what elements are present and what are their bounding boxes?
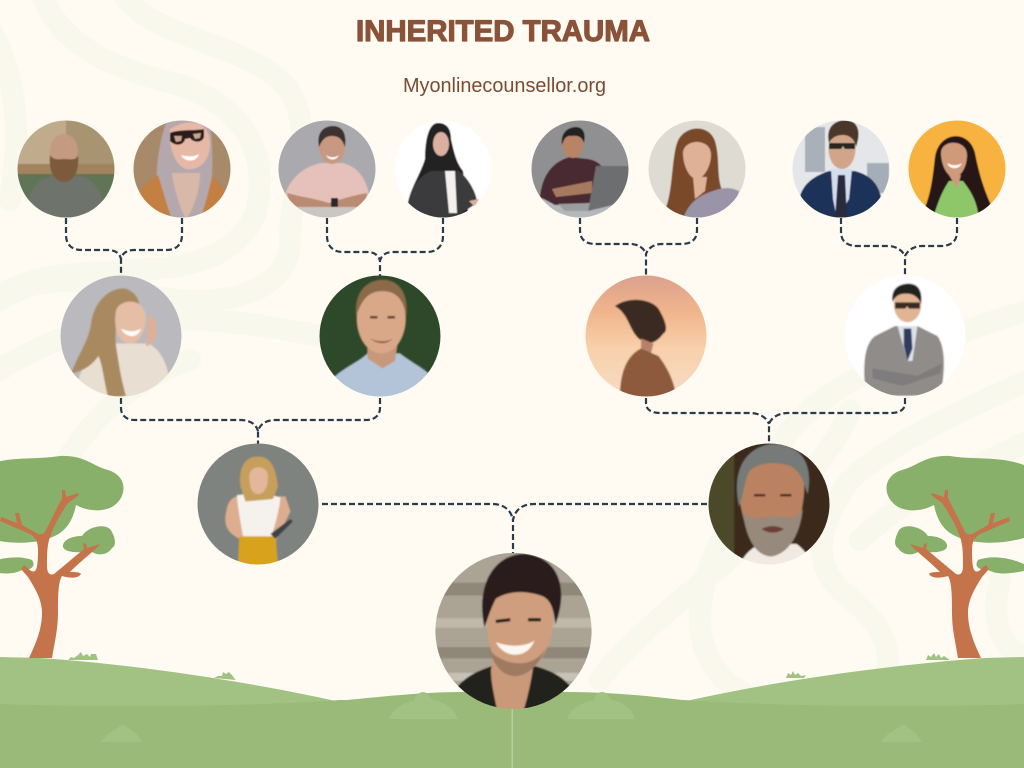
portrait: smiling young man — [433, 550, 594, 712]
left hill — [0, 657, 336, 707]
portrait: woman with long brown hair — [647, 119, 747, 219]
portrait: woman with glasses — [132, 119, 232, 219]
connector: pair 3 — [580, 218, 697, 276]
ground hills — [0, 652, 1024, 768]
connector: right parents — [646, 398, 905, 444]
mounds — [389, 692, 458, 719]
connector: main parents — [322, 504, 707, 553]
right hill — [686, 657, 1024, 707]
connector: pair 4 — [841, 218, 957, 276]
portrait: bearded man — [16, 119, 116, 219]
middle hill — [300, 692, 720, 768]
portrait: woman in white top with tablet — [196, 442, 320, 566]
tree: left — [0, 456, 124, 658]
connector: left parents — [121, 398, 380, 444]
portrait: man in pink shirt — [277, 119, 377, 219]
title: INHERITED TRAUMA — [356, 15, 650, 48]
subtitle: Myonlinecounsellor.org — [403, 75, 606, 97]
canopy main — [0, 456, 124, 543]
portrait: grey-haired man — [707, 442, 831, 566]
small canopy lobe low — [0, 557, 34, 574]
center line — [512, 708, 513, 768]
trunk and branches — [0, 490, 100, 658]
connector: pair 1 — [66, 218, 182, 276]
portrait: laughing blonde woman — [59, 274, 183, 398]
connectors — [66, 218, 957, 553]
portrait: woman in black jacket — [393, 119, 493, 219]
portrait: woman facing sunset — [584, 274, 708, 398]
portrait: man in grey suit — [843, 274, 967, 398]
portrait: man in blue shirt — [318, 274, 442, 398]
small canopy lobe — [63, 526, 115, 554]
portrait: woman on yellow background — [907, 119, 1007, 219]
grass tufts — [68, 652, 950, 680]
portrait: man with laptop — [530, 119, 630, 219]
foreground ground — [0, 700, 1024, 768]
connector: pair 2 — [327, 218, 443, 276]
portrait: man in navy suit — [791, 119, 891, 219]
tree: right — [886, 456, 1024, 658]
